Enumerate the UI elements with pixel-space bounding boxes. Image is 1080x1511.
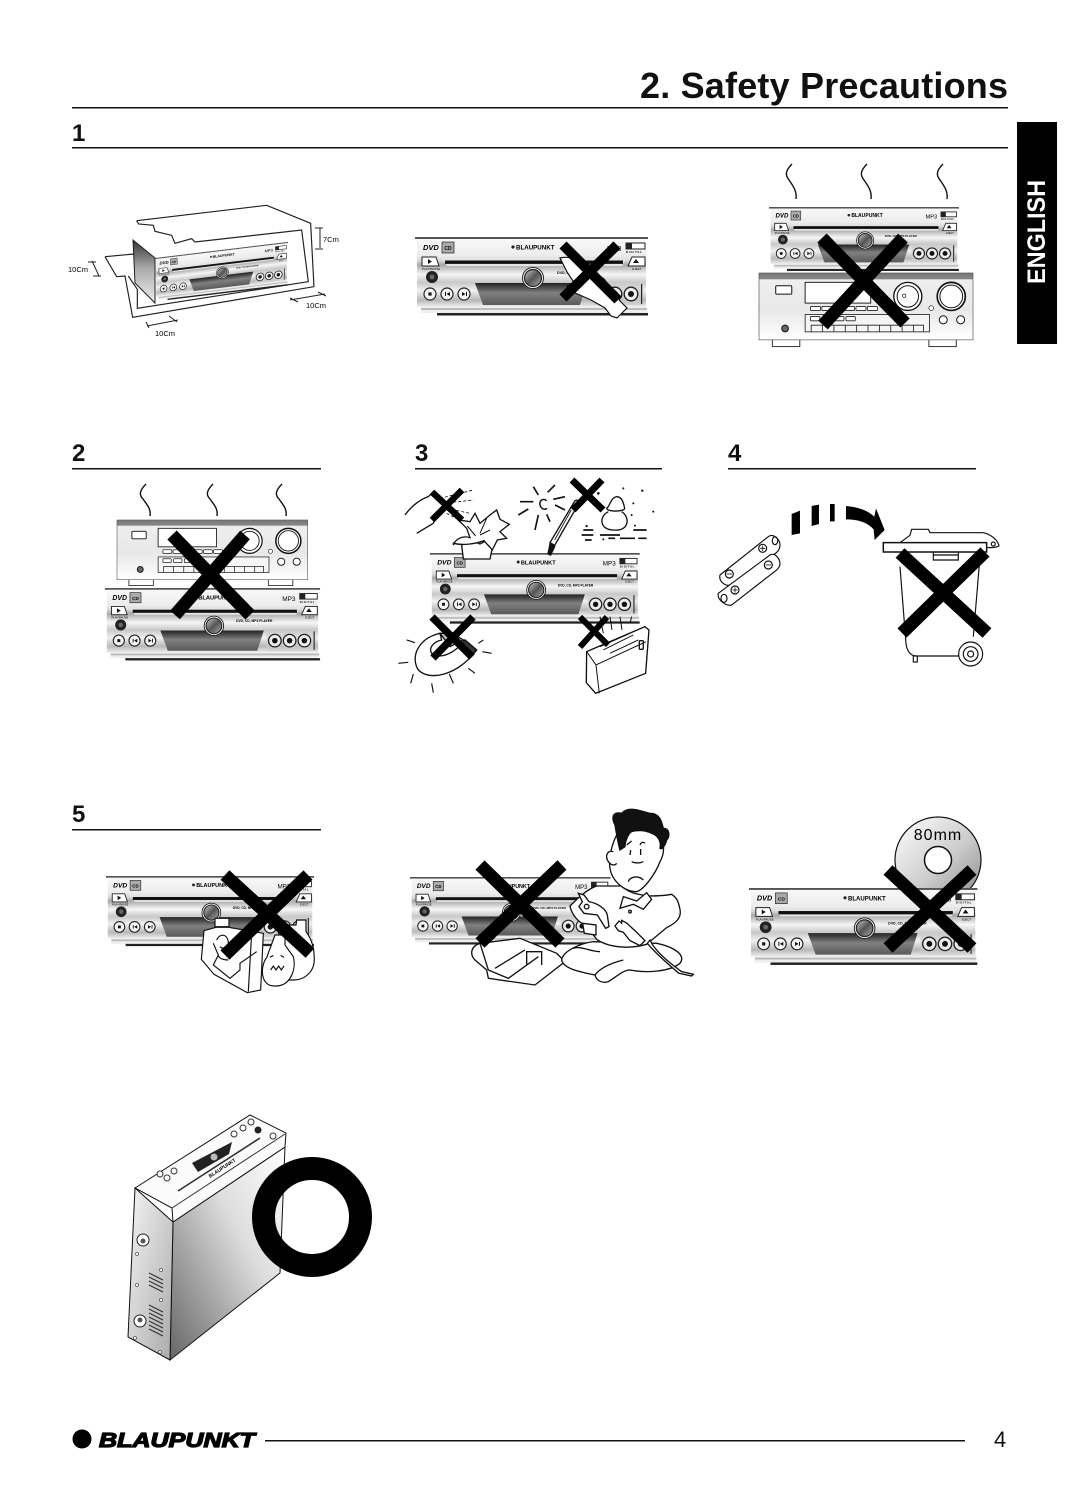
cardboard box bbox=[472, 938, 565, 985]
dimension: 7Cm bbox=[315, 228, 339, 249]
dimension: 10Cm bottom: 10Cm bbox=[155, 329, 175, 338]
footer logo bbox=[72, 1430, 257, 1452]
correct mark O bbox=[264, 1168, 360, 1266]
head bbox=[610, 828, 664, 892]
dimension: 10Cm right bbox=[290, 292, 326, 310]
section number 1: 1 bbox=[72, 120, 85, 147]
page number: 4 bbox=[994, 1427, 1006, 1452]
illustration: battery disposal bbox=[718, 504, 999, 666]
illustration: hand touching player bbox=[415, 237, 648, 318]
illustration: liquids and chemicals on player bbox=[106, 875, 314, 993]
pliers bbox=[578, 893, 609, 928]
legs bbox=[562, 942, 682, 982]
illustration: player stacked on amplifier, heat bbox=[759, 164, 973, 347]
section heading 4: 4 bbox=[728, 440, 742, 467]
illustration: amplifier on player, heat bbox=[105, 484, 320, 660]
title: 2. Safety Precautions bbox=[640, 65, 1008, 106]
illustration: ventilation clearance box bbox=[68, 205, 339, 338]
language tab: English bbox=[1017, 122, 1057, 344]
section heading 3: 3 bbox=[415, 440, 428, 467]
shirt bbox=[570, 886, 680, 947]
dimension: 10Cm bottom bbox=[146, 316, 178, 338]
collar bbox=[620, 893, 652, 909]
dimension: 10Cm left: 10Cm bbox=[68, 265, 88, 274]
illustration: 80mm disc not usable: 80mm bbox=[914, 827, 962, 844]
dimension: 10Cm right: 10Cm bbox=[306, 301, 326, 310]
cord bbox=[647, 940, 693, 976]
language tab: English: ENGLISH bbox=[1023, 180, 1051, 284]
illustration: player standing vertically with correct mark bbox=[128, 1115, 360, 1360]
section heading 2: 2 bbox=[72, 440, 85, 467]
dimension: 10Cm left bbox=[68, 261, 101, 276]
wrench and hand bbox=[615, 920, 645, 946]
illustration: do not disassemble, man with tools bbox=[410, 809, 693, 985]
illustration: environment hazards around player bbox=[398, 480, 654, 693]
illustration: 80mm disc not usable bbox=[749, 817, 981, 965]
footer logo: BLAUPUNKT bbox=[99, 1430, 257, 1452]
section heading 5: 5 bbox=[72, 801, 85, 828]
illustration: player standing vertically with correct mark: BLAUPUNKT bbox=[208, 1158, 237, 1180]
dimension: 7Cm: 7Cm bbox=[323, 235, 339, 244]
